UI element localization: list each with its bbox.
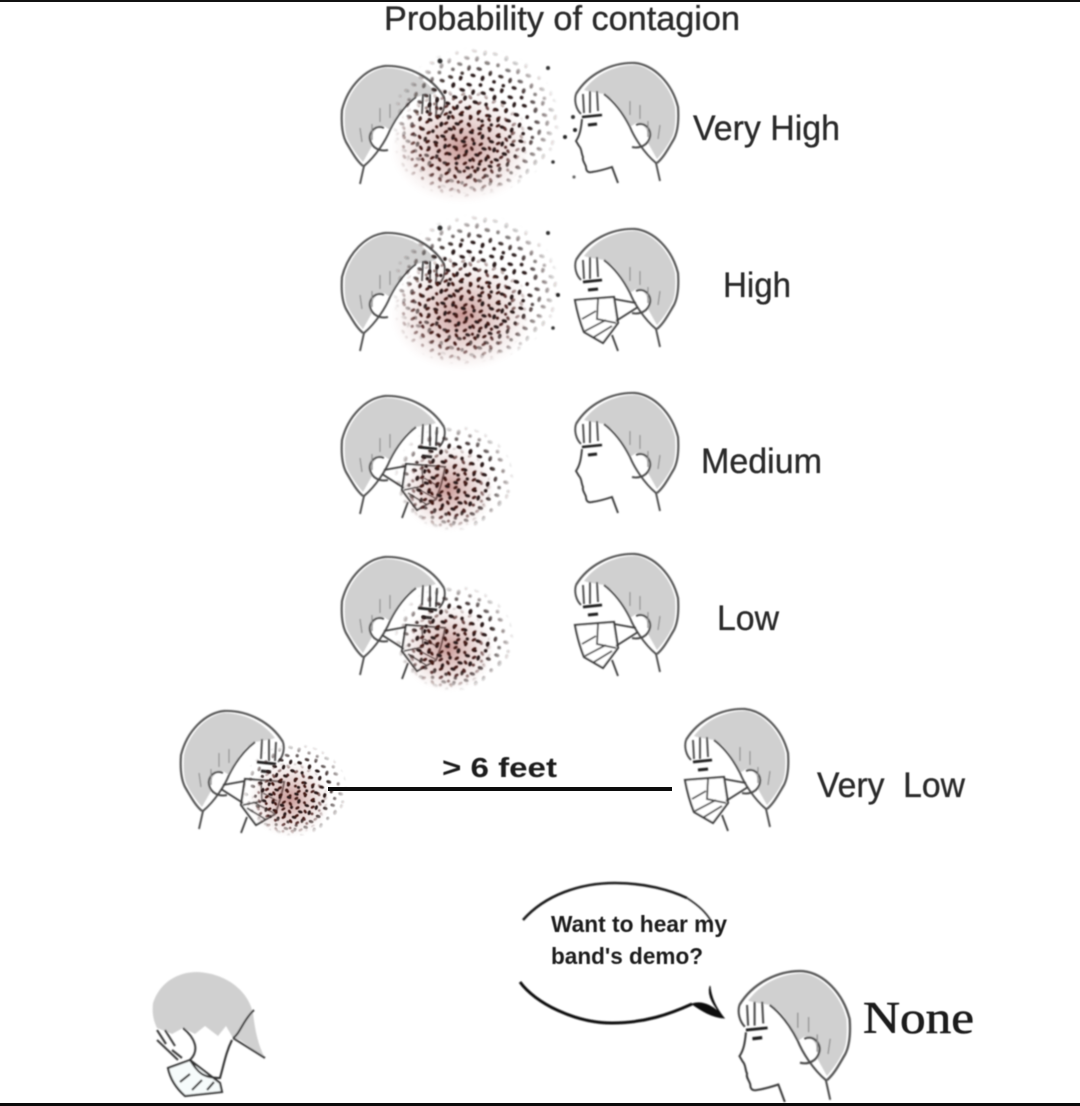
label: low: Low [717, 599, 780, 638]
row: very high [342, 47, 840, 204]
speech text [551, 911, 727, 969]
distance label: > 6 feet [442, 752, 557, 783]
row: low [342, 554, 780, 692]
left person masked [342, 396, 445, 518]
label: medium: Medium [701, 442, 822, 481]
person walking away with mask [153, 972, 265, 1096]
left person masked [181, 711, 284, 833]
speech text: band's demo? [551, 943, 703, 969]
spray cloud [390, 214, 560, 371]
bottom border [0, 1103, 1080, 1106]
row: very low [181, 709, 966, 838]
spray cloud [394, 585, 514, 692]
right person unmasked [575, 393, 678, 513]
left person masked [342, 557, 445, 679]
right person masked [685, 709, 788, 831]
label: very high: Very High [693, 109, 840, 148]
speaker [739, 971, 850, 1102]
left person unmasked [342, 233, 445, 351]
row: none [153, 883, 974, 1102]
title: Probability of contagion [384, 0, 740, 38]
right person masked [575, 229, 678, 351]
spray cloud [242, 743, 348, 838]
top border [0, 0, 1080, 2]
speech bubble [520, 883, 724, 1023]
distance line [328, 787, 672, 791]
label: none: None [863, 993, 974, 1043]
right person unmasked [575, 63, 678, 183]
label: very low: Very Low [817, 766, 966, 805]
row: medium [342, 393, 822, 532]
right person masked [575, 554, 678, 676]
left person unmasked [342, 66, 445, 184]
spray cloud [390, 47, 577, 204]
speech text: Want to hear my [551, 911, 727, 937]
row: high [342, 214, 791, 371]
spray cloud [394, 425, 514, 532]
label: high: High [723, 266, 791, 305]
